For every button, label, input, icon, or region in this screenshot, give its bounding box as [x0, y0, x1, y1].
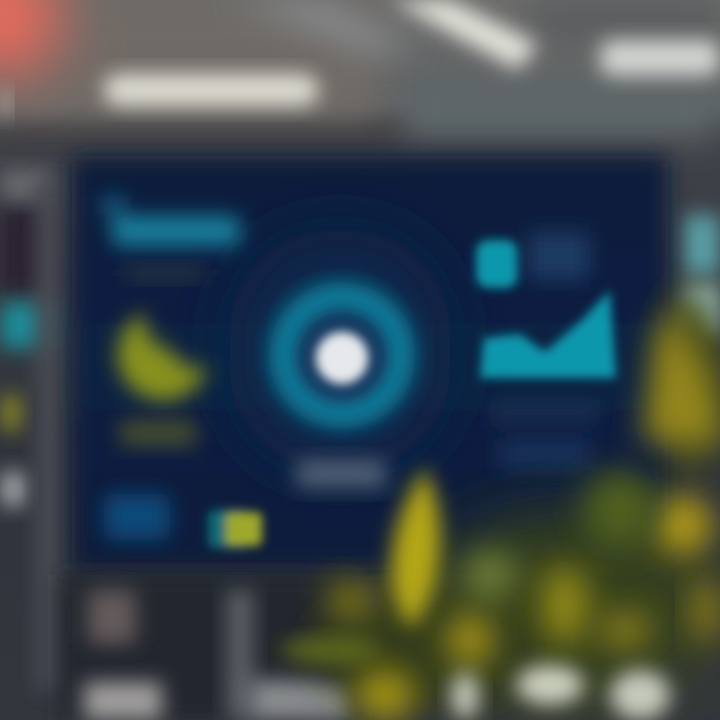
left edge: background shelves: [0, 170, 62, 690]
text block: faint label above gauge: [125, 266, 205, 280]
chart: teal donut: [284, 297, 400, 413]
text block: faint label below gauge: [120, 420, 196, 446]
right edge: background teal display: [684, 215, 720, 335]
chart: teal square and legend: [476, 232, 590, 288]
text block: faint lines below area chart: [490, 405, 600, 470]
panel: dashboard screen: [72, 156, 668, 570]
plants: yellow-green foliage: [280, 290, 720, 720]
heading: blurred teal title: [102, 195, 240, 246]
ceiling: salmon glow top left: [0, 0, 62, 77]
chart: lower-left blue block: [104, 494, 170, 540]
chart: yellow crescent gauge: [117, 312, 208, 401]
ceiling lights: [0, 0, 720, 116]
text block: caption below donut: [296, 460, 386, 488]
background: room wall and ceiling: [0, 0, 720, 206]
chart: teal area chart: [480, 290, 616, 378]
foot of room: dark stands and pale boxes: [60, 575, 360, 720]
icon: yellow-green tile: [208, 510, 262, 548]
